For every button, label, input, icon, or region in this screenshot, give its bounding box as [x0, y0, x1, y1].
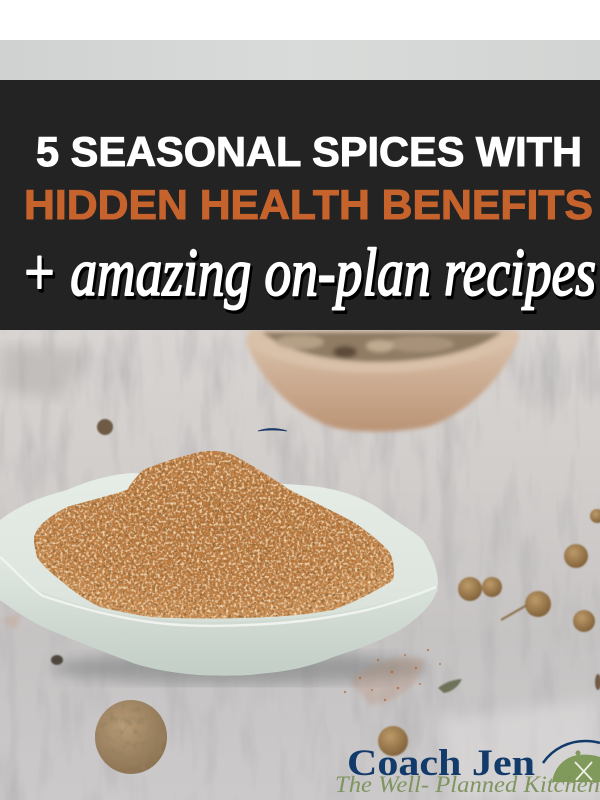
photo strip above banner	[0, 40, 600, 80]
photo: table scatter and shadow	[0, 419, 600, 705]
logo tagline: The Well- Planned Kitchen	[335, 772, 600, 797]
small navy arc	[258, 428, 287, 431]
top white margin	[0, 0, 600, 40]
bowl outer wall	[0, 557, 438, 676]
logo: Coach Jen	[335, 741, 600, 797]
heading line 1: 5 SEASONAL SPICES WITH	[36, 128, 582, 175]
dark banner	[0, 80, 600, 330]
heading line 2: HIDDEN HEALTH BENEFITS	[24, 181, 593, 228]
coriander seeds	[378, 509, 600, 756]
logo wordmark: Coach Jen	[347, 743, 535, 784]
photo: blurred wooden bowl	[245, 330, 520, 432]
white ceramic bowl	[0, 451, 438, 676]
photo: wooden table background	[0, 330, 600, 800]
spice powder mound	[34, 451, 394, 618]
nutmeg in foreground	[95, 700, 167, 774]
logo icon: cloche with cutlery	[543, 741, 600, 782]
